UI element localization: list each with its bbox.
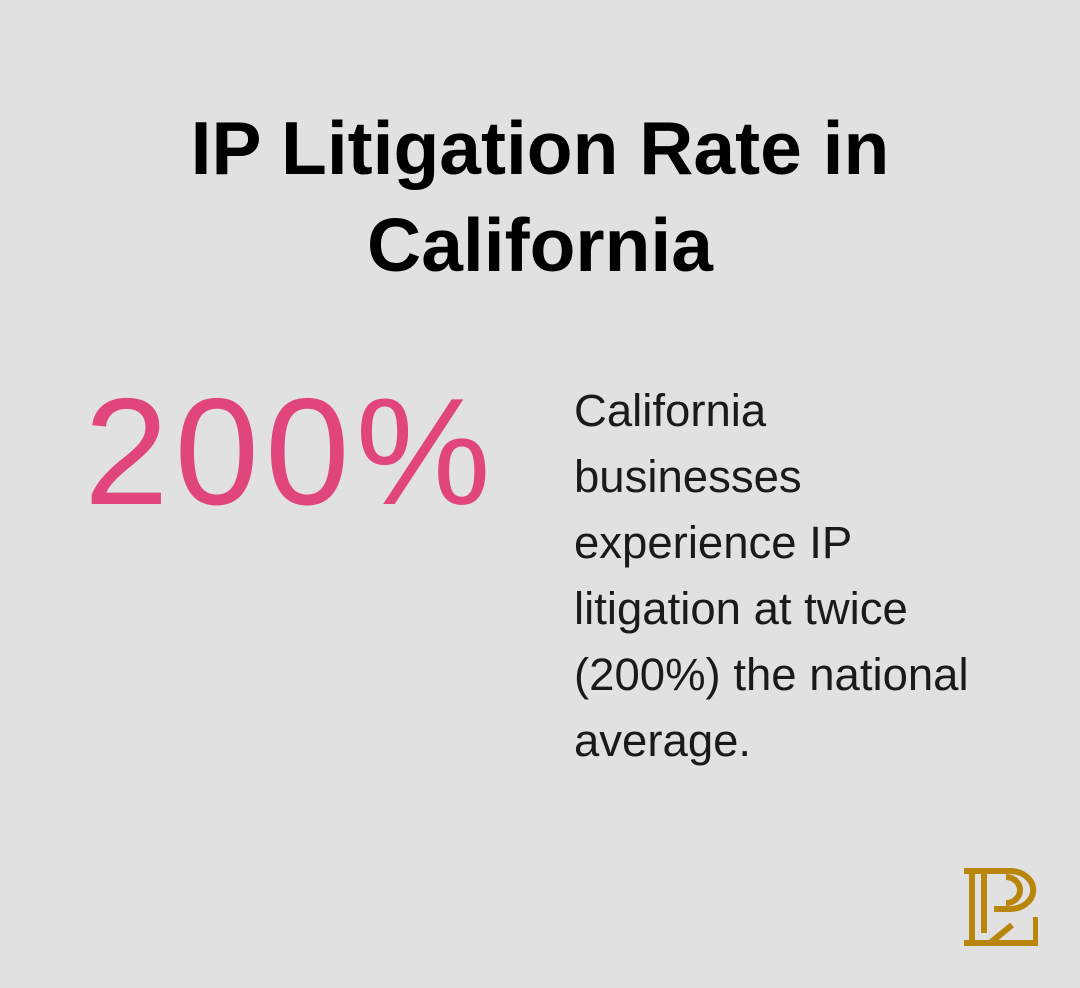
description text: businesses xyxy=(574,451,802,502)
description text xyxy=(574,385,969,766)
title xyxy=(191,106,889,287)
title: California xyxy=(367,203,713,287)
icon: logo xyxy=(964,868,1038,946)
title: IP Litigation Rate in xyxy=(191,106,889,190)
description text: (200%) the national xyxy=(574,649,969,700)
big stat: 200% xyxy=(84,367,497,537)
description text: California xyxy=(574,385,766,436)
description text: average. xyxy=(574,715,751,766)
description text: experience IP xyxy=(574,517,852,568)
description text: litigation at twice xyxy=(574,583,908,634)
